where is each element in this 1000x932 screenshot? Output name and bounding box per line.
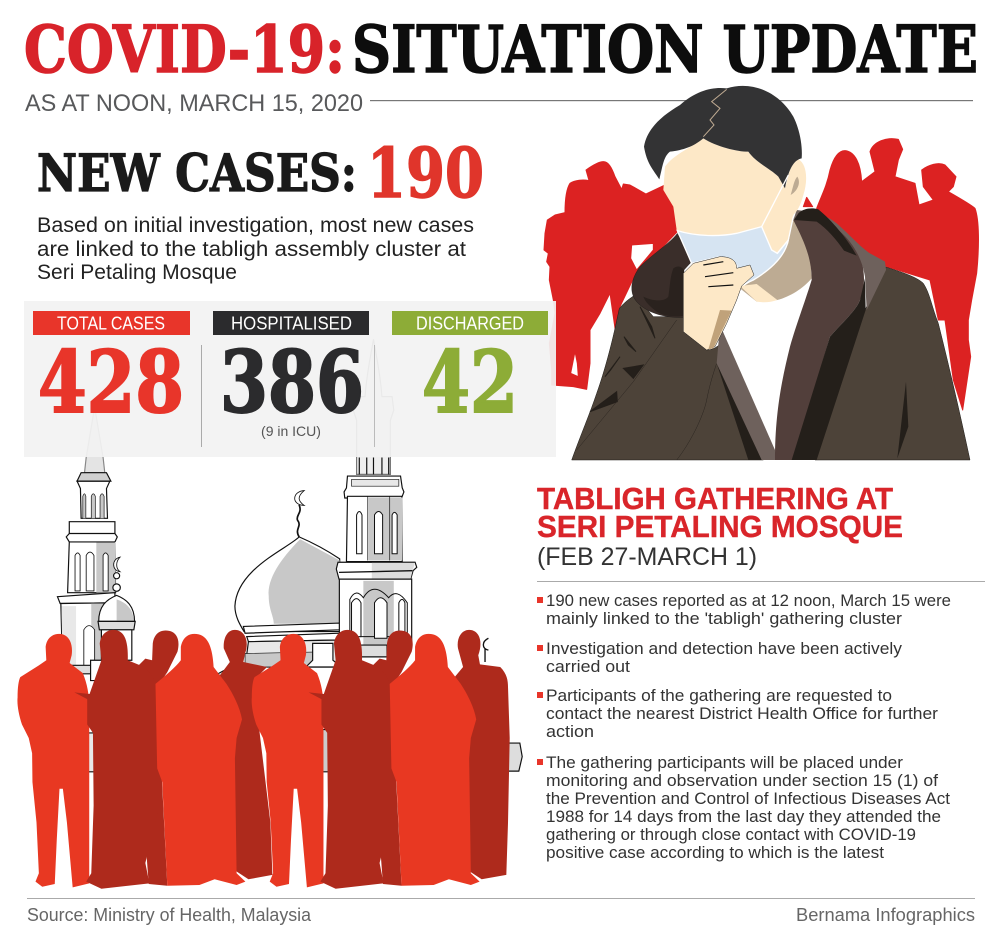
stat: hospitalised [213, 311, 369, 439]
red crowd right [803, 139, 978, 410]
bullet list: action [546, 722, 594, 741]
bullet list: monitoring and observation under section 15 (1) of [546, 771, 938, 790]
bullet list [537, 591, 951, 862]
new cases description: are linked to the tabligh assembly cluster at [37, 238, 466, 261]
stat: total cases: TOTAL CASES [57, 314, 165, 334]
figure: hooded woman right [390, 634, 480, 886]
figure: woman dark right [309, 630, 392, 889]
bullet list: The gathering participants will be placed under [546, 753, 903, 772]
neck [740, 217, 812, 302]
tabligh heading: SERI PETALING MOSQUE [537, 509, 903, 544]
bullet list: the Prevention and Control of Infectious Diseases Act [546, 789, 950, 808]
subtitle date: AS AT NOON, MARCH 15, 2020 [25, 90, 363, 117]
bullet list: 1988 for 14 days from the last day they attended the [546, 807, 941, 826]
mosque illustration [57, 339, 522, 772]
figure: man left [17, 634, 89, 887]
bullet list: Investigation and detection have been actively [546, 639, 903, 658]
tabligh heading: TABLIGH GATHERING AT [537, 481, 893, 516]
new cases description [37, 214, 474, 284]
illustration: man with mask and red crowd [544, 86, 978, 460]
face [663, 138, 806, 280]
stat: discharged: DISCHARGED [416, 314, 524, 334]
hair [644, 86, 802, 188]
crowd silhouettes [17, 630, 510, 889]
fur collar [632, 233, 692, 317]
bullet list: positive case according to which is the latest [546, 843, 884, 862]
base structures [68, 638, 522, 772]
new cases heading: 190 [367, 134, 484, 214]
stat: hospitalised: (9 in ICU) [261, 423, 321, 439]
figure: man right [252, 634, 323, 887]
new cases heading: NEW CASES: [37, 144, 357, 204]
stat: hospitalised: HOSPITALISED [231, 314, 352, 334]
stat: total cases: 428 [38, 333, 184, 433]
face mask [677, 227, 788, 286]
main dome [235, 491, 340, 667]
coat right [815, 267, 970, 460]
shirt [725, 277, 812, 450]
right minaret [336, 339, 417, 645]
hand [683, 257, 754, 350]
tabligh heading: (FEB 27-MARCH 1) [537, 543, 757, 571]
bullet list: carried out [546, 657, 630, 676]
figure: woman dark left [74, 630, 158, 889]
tabligh heading [537, 481, 903, 571]
red crowd left [544, 162, 677, 389]
coat left [572, 295, 763, 460]
new cases description: Seri Petaling Mosque [37, 261, 237, 284]
left lapel [717, 363, 763, 460]
bullet list: contact the nearest District Health Office for further [546, 704, 938, 723]
back figures [135, 630, 510, 886]
small dome [98, 557, 135, 660]
new cases heading [37, 134, 484, 214]
figure: hooded woman left [155, 634, 245, 886]
footer: Source: Ministry of Health, Malaysia [27, 905, 312, 925]
footer: Bernama Infographics [796, 905, 975, 925]
statistics panel [24, 301, 556, 457]
stat: hospitalised: 386 [220, 333, 364, 433]
bullet list: gathering or through close contact with COVID-19 [546, 825, 916, 844]
bullet list: mainly linked to the 'tabligh' gathering cluster [546, 609, 902, 628]
stat: discharged: 42 [422, 333, 518, 433]
footer [27, 898, 975, 925]
stat: discharged [392, 311, 548, 433]
left minaret [57, 407, 117, 667]
title [24, 12, 978, 88]
title: COVID-19: [24, 12, 345, 88]
bullet list: 190 new cases reported as at 12 noon, March 15 were [546, 591, 951, 610]
new cases description: Based on initial investigation, most new cases [37, 214, 474, 237]
bullet list: Participants of the gathering are requested to [546, 686, 892, 705]
